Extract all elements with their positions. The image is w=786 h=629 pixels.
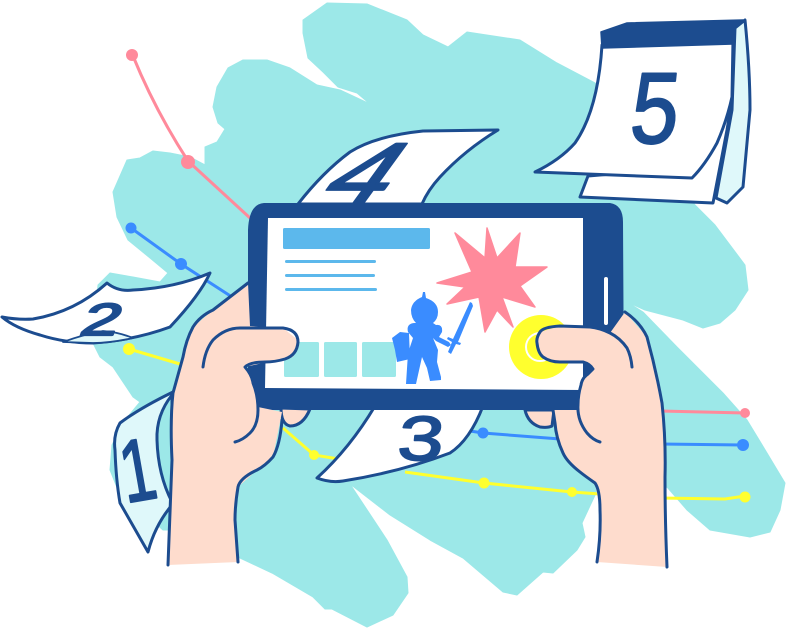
calendar (535, 20, 750, 203)
tablet (248, 203, 624, 410)
digit 3: 3 (395, 404, 448, 474)
paper 2 (2, 273, 210, 345)
paper 3 (317, 404, 483, 482)
tablet screen (265, 218, 583, 390)
right hand outline (625, 312, 667, 567)
left wrist outline (235, 420, 282, 562)
yellow line chart (123, 343, 750, 502)
screen text lines (285, 260, 377, 291)
yellow coin (509, 315, 573, 379)
screen header bar (283, 228, 430, 249)
left thumb outline (203, 328, 298, 442)
digit 5: 5 (626, 52, 685, 164)
digit 4: 4 (301, 126, 433, 222)
right hand (525, 312, 667, 567)
digit 1: 1 (112, 419, 163, 522)
side button (604, 277, 608, 325)
paper 1 (112, 392, 173, 552)
shield (392, 332, 410, 362)
calendar front page (535, 40, 733, 178)
tablet body (248, 203, 624, 410)
calendar binding (601, 20, 743, 48)
calendar back page (580, 100, 732, 203)
pink line chart (126, 49, 750, 418)
calendar back pale pages (716, 20, 750, 203)
paper 4 (298, 126, 498, 222)
blue line chart (126, 222, 749, 451)
sword (447, 302, 473, 354)
paper 1 fold (157, 395, 172, 502)
right palm fill (537, 312, 667, 567)
pink burst (437, 228, 547, 332)
left finger (281, 408, 310, 426)
digit 2: 2 (74, 295, 130, 345)
knight (392, 292, 473, 384)
inventory squares (284, 342, 396, 377)
left hand (168, 283, 310, 565)
head and body (406, 292, 451, 384)
right finger (525, 410, 554, 427)
left palm fill (168, 283, 298, 565)
right thumb outline (537, 326, 632, 442)
paper 2 underside (63, 331, 133, 343)
left hand outline (168, 283, 248, 565)
